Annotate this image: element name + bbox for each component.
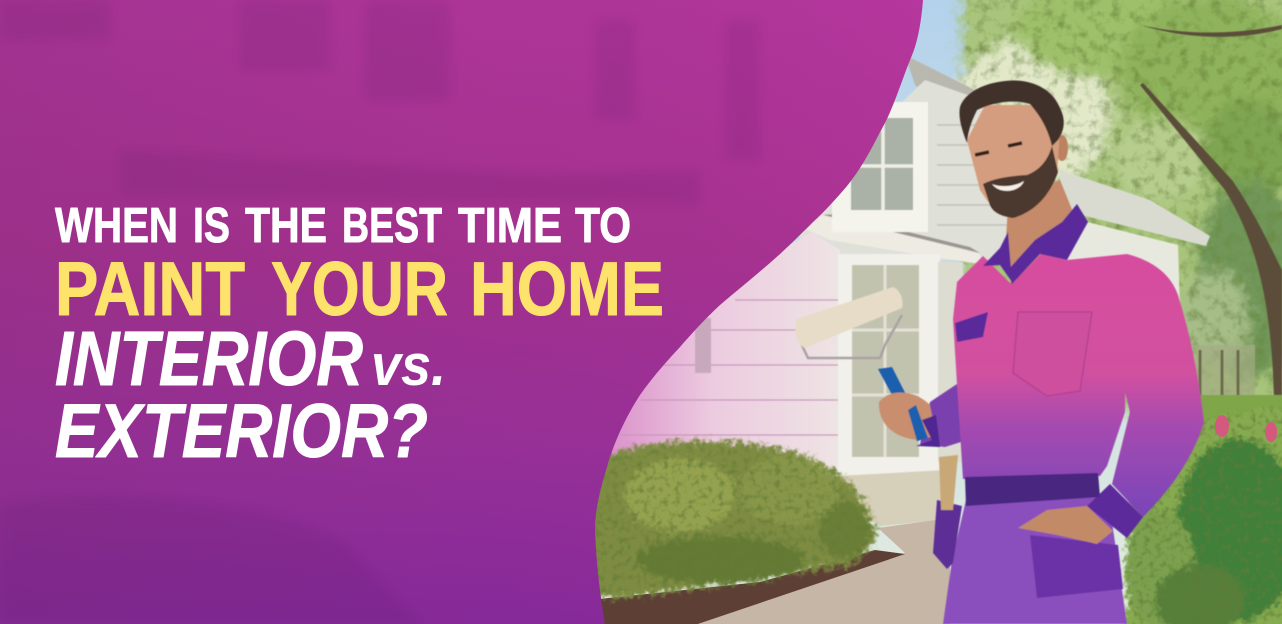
main curved panel [0, 0, 923, 624]
painter: eyes [975, 143, 1022, 155]
house: front steps [838, 470, 945, 526]
title line 4: exterior: EXTERIOR? [55, 389, 428, 474]
painter: thigh pocket [1030, 535, 1123, 598]
icon: paint roller [795, 287, 928, 441]
house: shutter [695, 318, 711, 373]
painter [795, 80, 1204, 624]
painter: collar right [1008, 204, 1088, 284]
icon: tool handle in belt [939, 455, 958, 510]
title line 2 [55, 247, 664, 332]
painter: chest pocket [1013, 312, 1092, 396]
shrub [585, 441, 875, 598]
painter: grip over hand [908, 405, 928, 441]
painter: left pouch [933, 500, 962, 569]
painter: shirt torso [953, 254, 1127, 479]
house: back wing wall [1060, 215, 1180, 330]
title [55, 199, 664, 474]
house: right siding [938, 262, 963, 462]
title line 2: PAINT [55, 247, 245, 332]
title line 1: THE [245, 199, 327, 253]
painter: face [967, 105, 1060, 218]
painter: ear [1056, 135, 1068, 161]
painter: hair [959, 80, 1064, 146]
title line 1: TIME [458, 199, 562, 253]
house: porch roof [806, 215, 980, 264]
painter: hand holding roller [879, 393, 936, 440]
garden path [670, 518, 950, 624]
painter: hand in pocket [1018, 506, 1113, 544]
house: back wing roof [1060, 170, 1210, 246]
house: upper wall [800, 80, 1010, 260]
painter: beard [983, 146, 1058, 218]
painter: right sleeve [1112, 254, 1204, 517]
painter: collar left [983, 232, 1012, 282]
house: lower window [838, 254, 940, 476]
painter: smile [992, 181, 1024, 191]
painter: trousers [943, 495, 1127, 624]
title line 3: interior: INTERIOR [55, 316, 363, 402]
right hedge [1125, 405, 1282, 624]
title line 2: HOME [470, 247, 664, 332]
flower buds [1215, 415, 1277, 442]
sky [590, 0, 1282, 624]
title line 1: WHEN [55, 199, 178, 253]
trees [950, 0, 1282, 410]
house: upper roof [905, 55, 1000, 125]
painter: shoulder pocket flap [955, 312, 988, 342]
title line 1: TO [575, 199, 631, 253]
painter: belt [965, 473, 1100, 506]
title line 1: IS [193, 199, 230, 253]
house: lower wall with pink fade [585, 232, 840, 490]
house [585, 55, 1210, 526]
mulch bed [590, 550, 905, 624]
painter: cuff [1087, 484, 1143, 538]
title line 1: BEST [342, 199, 442, 253]
title line 1 [55, 199, 631, 253]
tree trunks and lawn [1130, 25, 1282, 445]
title line 3: vs.: vs. [371, 333, 446, 398]
painter: left sleeve [920, 384, 964, 447]
painter: neck [1006, 180, 1073, 284]
house: upper window [832, 102, 928, 232]
title line 2: YOUR [271, 247, 448, 332]
painter: sleeve cuff [916, 415, 940, 447]
